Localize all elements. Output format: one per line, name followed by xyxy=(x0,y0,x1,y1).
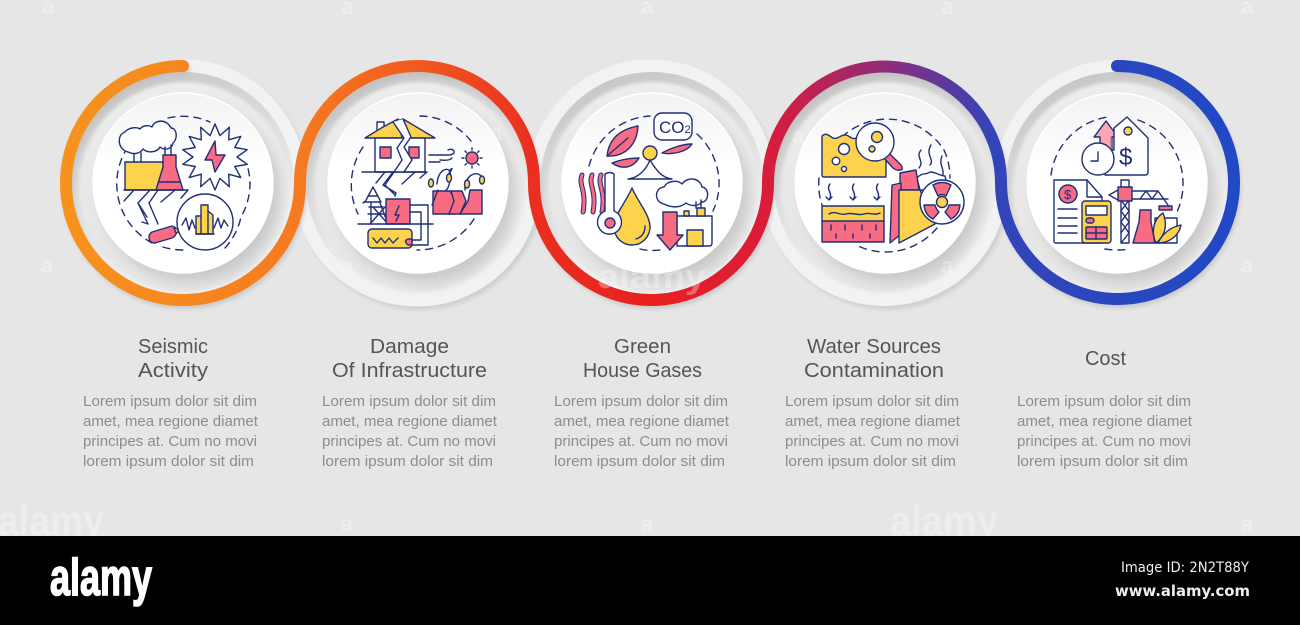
text block: cost: amet, mea regione diamet xyxy=(1017,414,1192,430)
text block: damage of infrastructure: Lorem ipsum dolor sit dim xyxy=(322,394,496,410)
heading: seismic activity: Seismic xyxy=(138,336,208,358)
tower xyxy=(900,170,919,190)
turbine blades xyxy=(662,144,692,154)
icon: seismic activity xyxy=(117,116,250,250)
sun xyxy=(466,152,478,164)
text block: green house gases: amet, mea regione diamet xyxy=(554,414,729,430)
heat waves xyxy=(581,175,603,212)
magnifier xyxy=(177,194,233,250)
text block: green house gases: Lorem ipsum dolor sit dim xyxy=(554,394,728,410)
electrical box xyxy=(386,199,410,224)
leaves xyxy=(1153,213,1165,243)
house walls xyxy=(375,138,425,172)
yellow cable box xyxy=(368,229,412,248)
watermarks: alamy xyxy=(890,497,999,544)
text block: damage of infrastructure xyxy=(322,394,497,470)
text block: cost: lorem ipsum dolor sit dim xyxy=(1017,454,1188,470)
down arrows xyxy=(826,184,880,200)
clock xyxy=(1082,143,1114,175)
icon: cost: $ xyxy=(1064,187,1072,202)
text block: seismic activity: lorem ipsum dolor sit dim xyxy=(83,454,254,470)
watermarks: a xyxy=(1241,253,1254,278)
plant stems xyxy=(437,169,481,190)
ground and cracks xyxy=(124,190,188,224)
icon: green house gases: CO2 xyxy=(659,118,691,137)
cooling tower xyxy=(156,155,183,190)
text block: water sources contamination xyxy=(785,394,960,470)
text block: cost: Lorem ipsum dolor sit dim xyxy=(1017,394,1191,410)
image id: Image ID: 2N2T88Y xyxy=(1121,560,1249,576)
text block: water sources contamination: principes at. Cum no movi xyxy=(785,434,959,450)
heading: seismic activity: Activity xyxy=(138,360,208,382)
price tag xyxy=(1105,117,1148,175)
CO2 badge xyxy=(654,113,692,140)
document xyxy=(1054,180,1102,243)
text block: cost: principes at. Cum no movi xyxy=(1017,434,1191,450)
tower xyxy=(1133,210,1155,243)
watermarks over circles: a xyxy=(792,123,805,148)
chimney xyxy=(377,122,384,130)
crane xyxy=(1121,180,1129,243)
icon: green house gases xyxy=(581,113,719,250)
factory xyxy=(677,216,712,246)
watermarks over circles: a xyxy=(490,120,503,145)
website: www.alamy.com xyxy=(1115,582,1250,600)
icon: damage of infrastructure xyxy=(351,116,484,250)
soil layers xyxy=(822,206,884,222)
icon: cost xyxy=(1051,117,1183,250)
cloud xyxy=(656,179,708,207)
magnifier xyxy=(884,154,902,170)
watermarks: a xyxy=(1241,511,1254,536)
heading: damage of infrastructure: Damage xyxy=(370,336,449,358)
text block: seismic activity: amet, mea regione diamet xyxy=(83,414,258,430)
text block: seismic activity xyxy=(83,394,258,470)
thermometer xyxy=(598,172,622,234)
star burst xyxy=(183,124,247,190)
watermarks: a xyxy=(41,253,54,278)
watermarks over circles: a xyxy=(341,253,354,278)
watermarks over circles xyxy=(341,120,954,296)
text block: damage of infrastructure: amet, mea regione diamet xyxy=(322,414,497,430)
text block: water sources contamination: amet, mea regione diamet xyxy=(785,414,960,430)
text block: damage of infrastructure: principes at. Cum no movi xyxy=(322,434,496,450)
text block: green house gases: lorem ipsum dolor sit dim xyxy=(554,454,725,470)
watermarks over circles: alamy xyxy=(598,258,706,296)
text block: damage of infrastructure: lorem ipsum dolor sit dim xyxy=(322,454,493,470)
radiation symbol xyxy=(920,180,964,224)
footer bar xyxy=(0,536,1300,625)
text block: water sources contamination: Lorem ipsum dolor sit dim xyxy=(785,394,959,410)
drop xyxy=(614,188,650,245)
wind xyxy=(429,149,454,162)
calculator xyxy=(1082,201,1111,243)
down arrow xyxy=(657,212,683,250)
text block: cost xyxy=(1017,394,1192,470)
heading: green house gases xyxy=(583,336,702,382)
arrow xyxy=(1094,121,1118,152)
heading: water sources contamination xyxy=(804,336,944,382)
heading: damage of infrastructure: Of Infrastructure xyxy=(332,360,487,382)
watermarks: a xyxy=(641,511,654,536)
heading: water sources contamination: Contamination xyxy=(804,360,944,382)
power pylon xyxy=(363,187,388,224)
stand xyxy=(628,160,672,179)
text block: green house gases: principes at. Cum no movi xyxy=(554,434,728,450)
watermarks: a xyxy=(341,511,354,536)
icon: water sources contamination xyxy=(819,119,964,252)
heading: cost: Cost xyxy=(1085,348,1126,370)
heading: green house gases: House Gases xyxy=(583,360,702,382)
icon: cost: $ xyxy=(1119,144,1132,171)
heading: damage of infrastructure xyxy=(332,336,487,382)
light unfilled ring segments xyxy=(183,66,1120,304)
text block: green house gases xyxy=(554,394,729,470)
text block: seismic activity: Lorem ipsum dolor sit dim xyxy=(83,394,257,410)
leaf xyxy=(607,126,638,156)
house roof xyxy=(365,119,402,138)
damaged pink factory xyxy=(433,191,456,214)
watermarks over circles: a xyxy=(941,253,954,278)
steam xyxy=(919,145,943,177)
watermarks: alamy xyxy=(0,497,105,544)
alamy logo: alamy xyxy=(50,549,152,607)
text block: water sources contamination: lorem ipsum dolor sit dim xyxy=(785,454,956,470)
factory xyxy=(125,162,163,190)
heading: green house gases: Green xyxy=(614,336,671,358)
house crack xyxy=(393,119,412,172)
circle bases xyxy=(72,72,1228,294)
gradient ribbon xyxy=(66,66,1236,304)
heading: seismic activity xyxy=(138,336,208,382)
ground cracks xyxy=(362,172,427,196)
cloud xyxy=(119,121,176,154)
box xyxy=(1155,218,1177,243)
heading: water sources contamination: Water Sources xyxy=(807,336,941,358)
text block: seismic activity: principes at. Cum no movi xyxy=(83,434,257,450)
yellow soil block xyxy=(822,130,886,177)
